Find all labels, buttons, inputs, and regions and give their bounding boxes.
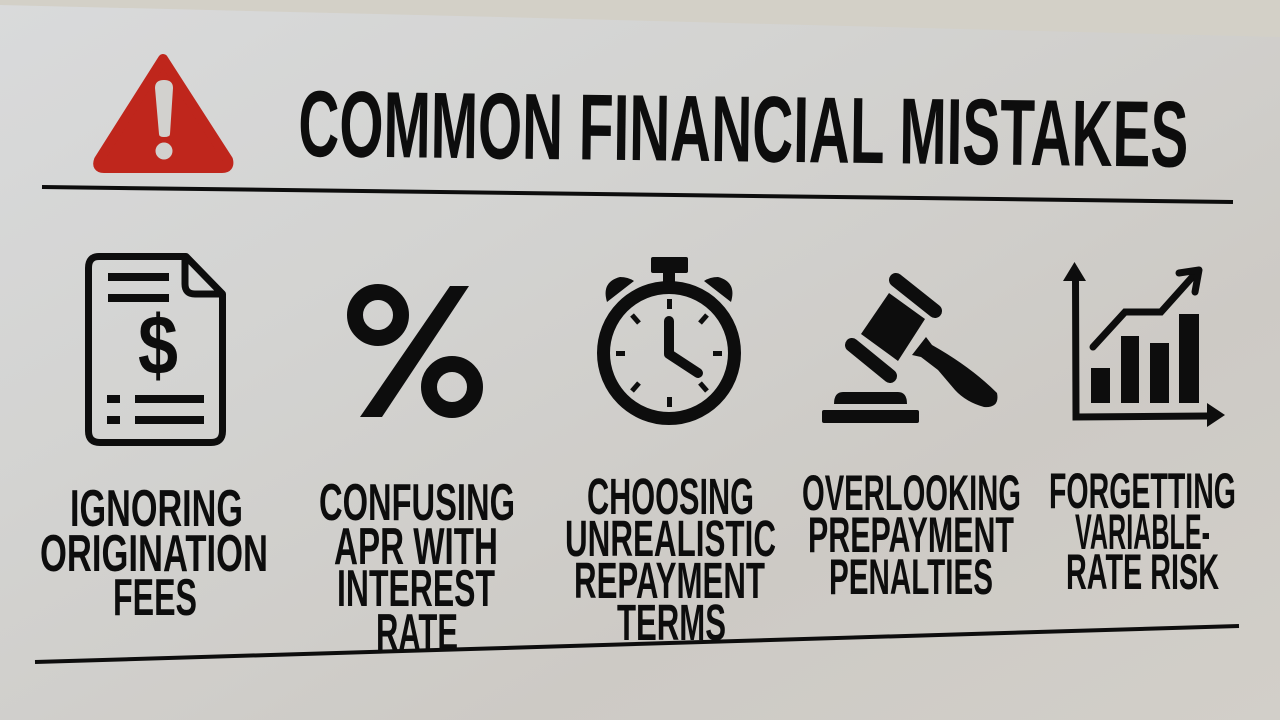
- icon: fee document: $: [138, 298, 178, 392]
- icon: warning triangle: [98, 59, 228, 168]
- icon: fee document: [88, 256, 222, 442]
- label: ignoring origination fees: [40, 480, 268, 627]
- label: confusing apr with interest rate: [319, 474, 515, 662]
- label: choosing unrealistic repayment terms: UNREALISTIC: [565, 510, 776, 567]
- icon: rising rate chart: [1063, 262, 1225, 427]
- icon: gavel: [822, 280, 997, 423]
- label: choosing unrealistic repayment terms: REPAYMENT: [574, 552, 765, 609]
- label: confusing apr with interest rate: CONFUSING: [319, 474, 515, 532]
- label: ignoring origination fees: ORIGINATION: [40, 525, 268, 583]
- label: choosing unrealistic repayment terms: CHOOSING: [587, 468, 754, 525]
- icon: percent: [355, 286, 475, 417]
- label: confusing apr with interest rate: RATE: [376, 604, 458, 662]
- label: ignoring origination fees: FEES: [113, 569, 197, 627]
- label: forgetting variable-rate risk: [1049, 463, 1236, 600]
- label: overlooking prepayment penalties: OVERLOOKING: [802, 465, 1021, 521]
- divider: top rule: [42, 187, 1233, 202]
- label: confusing apr with interest rate: APR WITH: [334, 518, 498, 576]
- label: ignoring origination fees: IGNORING: [70, 480, 243, 538]
- label: overlooking prepayment penalties: PENALTIES: [829, 549, 993, 605]
- label: overlooking prepayment penalties: PREPAYMENT: [808, 507, 1014, 563]
- divider: bottom rule: [35, 626, 1239, 662]
- icon: stopwatch: [604, 257, 734, 418]
- label: choosing unrealistic repayment terms: [565, 468, 776, 651]
- label: confusing apr with interest rate: INTEREST: [337, 560, 495, 618]
- label: overlooking prepayment penalties: [802, 465, 1021, 605]
- label: choosing unrealistic repayment terms: TERMS: [617, 594, 726, 651]
